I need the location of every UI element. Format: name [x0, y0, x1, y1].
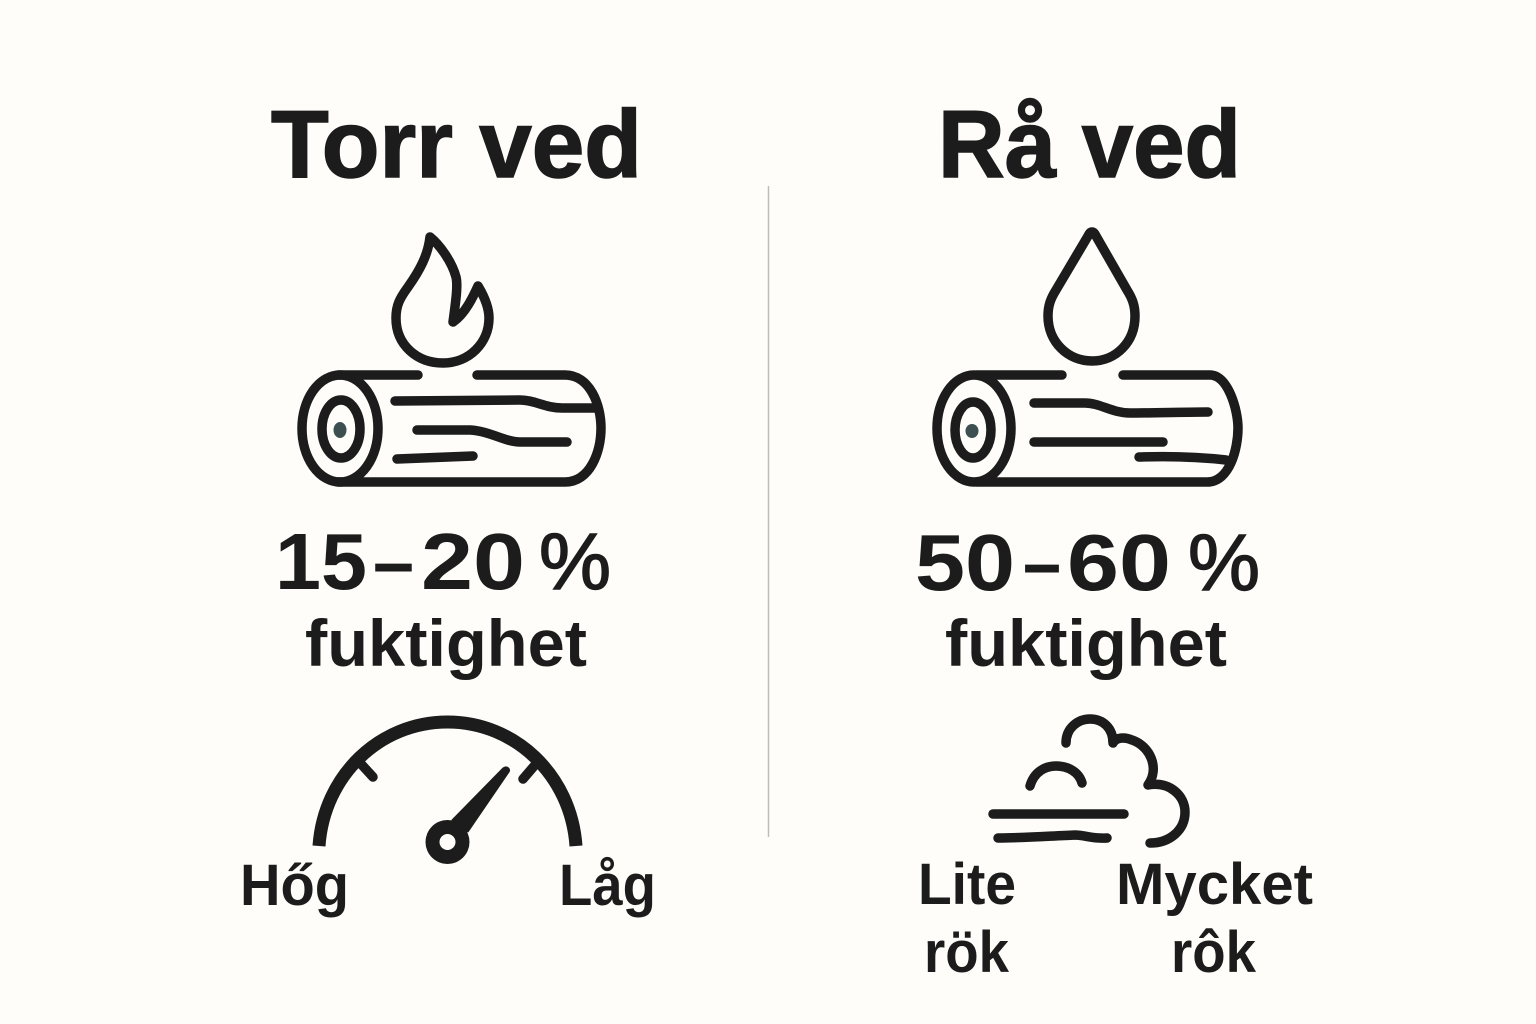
smoke label: high: Mycket	[1116, 852, 1313, 917]
heading: Rå ved: Rå ved	[938, 91, 1241, 198]
moisture value: 50–60 %: %	[1188, 518, 1260, 607]
gauge label: high: Hőg	[240, 853, 349, 918]
gauge label: low: Låg	[559, 853, 656, 918]
panel: rå ved	[915, 91, 1313, 985]
smoke label: low	[918, 852, 1016, 985]
moisture value: 50–60 %	[915, 518, 1260, 607]
icon: gauge	[319, 722, 576, 864]
smoke label: high	[1116, 852, 1313, 985]
icon: water drop	[1048, 232, 1135, 361]
heading: Torr ved: Torr ved	[271, 91, 642, 198]
moisture value: 15–20 %: –	[373, 517, 414, 606]
panel: torr ved	[240, 91, 656, 918]
moisture value: 15–20 %: 15	[275, 517, 367, 606]
moisture value: 50–60 %: –	[1023, 518, 1061, 607]
icon: wet log	[937, 375, 1238, 482]
moisture value: 15–20 %: %	[539, 517, 611, 606]
smoke label: low: rök	[924, 920, 1010, 985]
moisture value: 50–60 %: 60	[1067, 518, 1171, 607]
smoke label: high: rôk	[1171, 920, 1257, 985]
smoke label: low: Lite	[918, 852, 1016, 917]
moisture value: 50–60 %: 50	[915, 518, 1015, 607]
moisture label: fuktighet	[305, 606, 587, 680]
icon: dry log	[302, 375, 601, 482]
moisture label: fuktighet	[945, 606, 1227, 680]
icon: flame	[396, 237, 489, 363]
moisture value: 15–20 %: 20	[421, 517, 525, 606]
icon: smoke cloud	[993, 719, 1185, 843]
moisture value: 15–20 %	[275, 517, 611, 606]
